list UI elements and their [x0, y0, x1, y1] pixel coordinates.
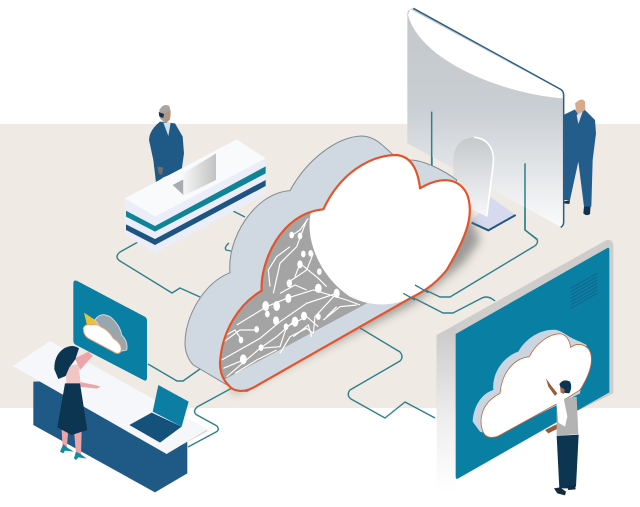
lines over cloud: [403, 285, 428, 300]
laptop: [129, 385, 189, 443]
panel frame: [437, 240, 613, 410]
wall screen: [73, 281, 147, 381]
panel cloud: [481, 334, 591, 437]
circuit board: [221, 156, 469, 379]
desk body: [125, 139, 266, 253]
presenter: man in suit behind monitor: [563, 100, 596, 215]
desk body: [33, 380, 187, 492]
desk top: [13, 341, 207, 454]
desk stripes: [126, 166, 266, 232]
screen cloud icon: [83, 313, 127, 353]
cloud back extrusion: [185, 136, 457, 392]
background band: [0, 124, 640, 408]
white cloud face: [310, 156, 469, 304]
desk top: [125, 139, 266, 217]
woman: [54, 346, 101, 460]
laptop screen: [183, 153, 216, 196]
lines on monitor: [432, 112, 537, 239]
monitor navy edge: [413, 8, 564, 227]
connector lines: [117, 112, 538, 447]
cloud orange outline: [220, 155, 470, 391]
frame side fade: [437, 327, 456, 493]
central cloud: [185, 130, 480, 393]
left desk scene: [13, 281, 207, 492]
monitor white highlight: [408, 9, 563, 98]
right monitor with presenter: [407, 8, 596, 239]
cloud front fill: [220, 155, 470, 391]
top desk with man: [125, 105, 266, 253]
monitor back: [407, 8, 563, 228]
man standing at desk: [149, 105, 184, 183]
man: [545, 378, 579, 495]
monitor stand neck: [453, 137, 493, 217]
blue panel: [456, 248, 609, 479]
cloud shadow: [230, 210, 480, 393]
monitor stand base: [472, 197, 516, 232]
vent lines: [571, 273, 597, 308]
right panel with cloud and man: [437, 240, 613, 495]
laptop keyboard: [173, 179, 183, 195]
panel cloud extrusion: [473, 330, 587, 437]
